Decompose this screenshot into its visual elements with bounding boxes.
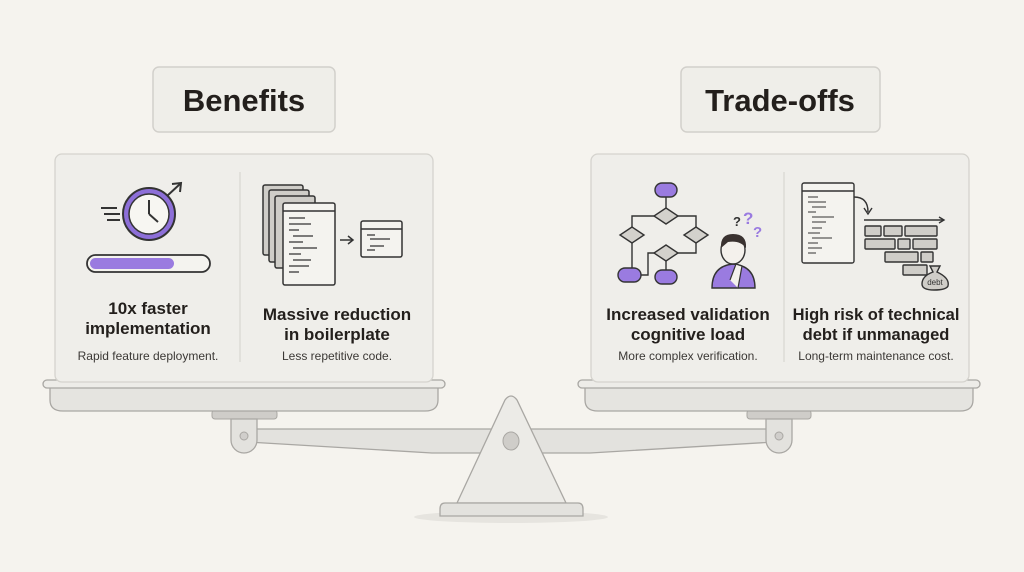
title: Trade-offs — [681, 67, 880, 132]
icon: stacked code windows to single window — [263, 185, 402, 285]
panel: trade-offs — [591, 154, 969, 382]
text: technical debt: debt if unmanaged — [803, 326, 949, 344]
right hinge — [747, 410, 811, 453]
text: boilerplate: in boilerplate — [284, 325, 390, 344]
icon: code to brick wall with debt bag — [802, 183, 948, 290]
fulcrum — [440, 396, 583, 516]
text: boilerplate: Massive reduction — [263, 305, 411, 324]
text: technical debt — [793, 306, 959, 363]
title: Trade-offs: Trade-offs — [705, 83, 855, 118]
title: Benefits — [153, 67, 335, 132]
text: validation — [606, 305, 770, 363]
text: validation: cognitive load — [631, 325, 745, 344]
beam — [248, 429, 775, 453]
right pan — [578, 380, 980, 411]
icon: code to brick wall with debt bag: debt — [927, 278, 944, 287]
scale stand — [212, 396, 811, 523]
text: boilerplate: Less repetitive code. — [282, 349, 392, 363]
text: 10x faster: implementation — [85, 319, 211, 338]
icon: confused person — [712, 209, 762, 288]
icon: stopwatch with progress bar — [87, 183, 210, 272]
text: validation: Increased validation — [606, 305, 770, 324]
panel: benefits — [55, 154, 433, 382]
text: 10x faster: Rapid feature deployment. — [78, 349, 218, 363]
text: boilerplate — [263, 305, 411, 363]
icon: confused person: ? — [733, 214, 741, 229]
left hinge — [212, 410, 277, 453]
text: validation: More complex verification. — [618, 349, 758, 363]
title: Benefits: Benefits — [183, 83, 305, 118]
text: technical debt: High risk of technical — [793, 306, 959, 324]
text: 10x faster — [78, 299, 218, 363]
icon: confused person: ? — [743, 209, 753, 228]
icon: flowchart — [618, 183, 708, 284]
icon: confused person: ? — [753, 224, 762, 241]
left pan — [43, 380, 445, 411]
text: technical debt: Long-term maintenance cost. — [798, 349, 954, 363]
text: 10x faster: 10x faster — [108, 299, 188, 318]
